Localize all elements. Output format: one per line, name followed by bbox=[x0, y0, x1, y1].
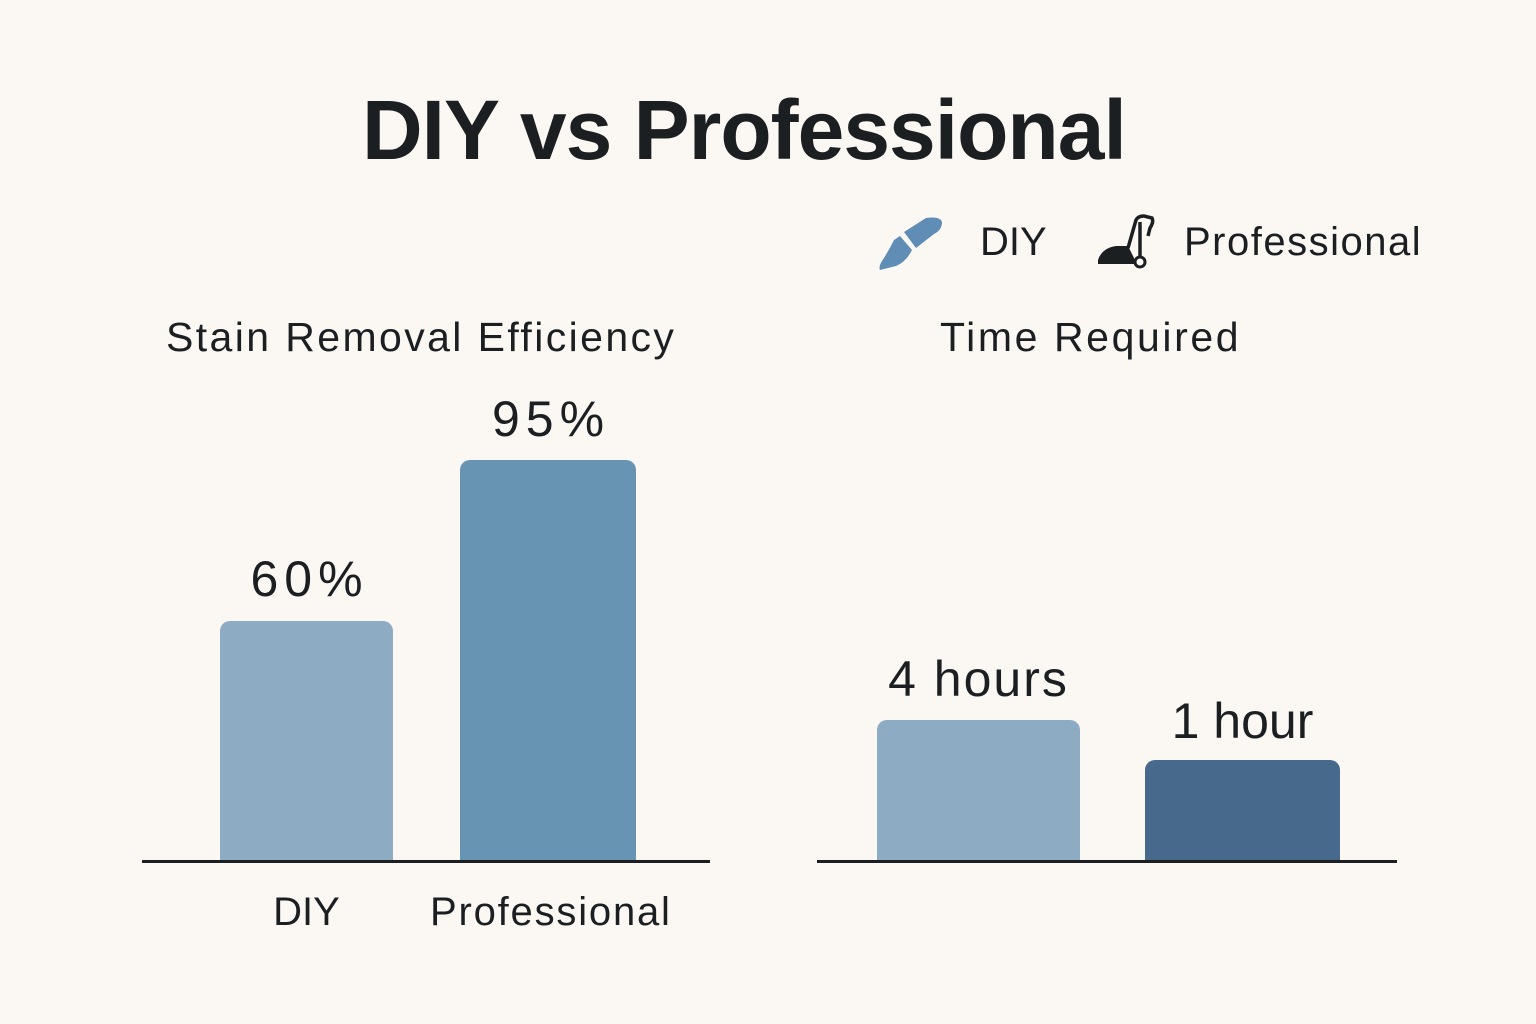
bar Professional 1 hour bbox=[1145, 693, 1340, 860]
bar DIY 60% bbox=[220, 551, 393, 860]
heading: Stain Removal Efficiency bbox=[166, 314, 676, 360]
bar DIY 4 hours: 4 hours bbox=[888, 651, 1069, 707]
bar DIY 60%: 60% bbox=[250, 551, 369, 607]
bar Professional 95%: 95% bbox=[492, 391, 610, 447]
bar Professional 95% bbox=[460, 391, 636, 860]
legend: Professional bbox=[1184, 220, 1422, 264]
legend: DIY bbox=[980, 220, 1047, 264]
panel: stain removal efficiency: Professional bbox=[430, 890, 672, 934]
panel: stain removal efficiency bbox=[142, 314, 710, 934]
axis labels: DIY bbox=[273, 890, 340, 934]
legend bbox=[880, 214, 1422, 270]
bar Professional 1 hour: 1 hour bbox=[1172, 693, 1313, 749]
bar DIY 4 hours bbox=[877, 651, 1080, 860]
icon: brush bbox=[880, 218, 942, 270]
title: DIY vs Professional bbox=[362, 83, 1126, 177]
heading: Time Required bbox=[940, 314, 1241, 360]
panel: time required bbox=[817, 314, 1397, 863]
icon: vacuum bbox=[1098, 214, 1154, 268]
